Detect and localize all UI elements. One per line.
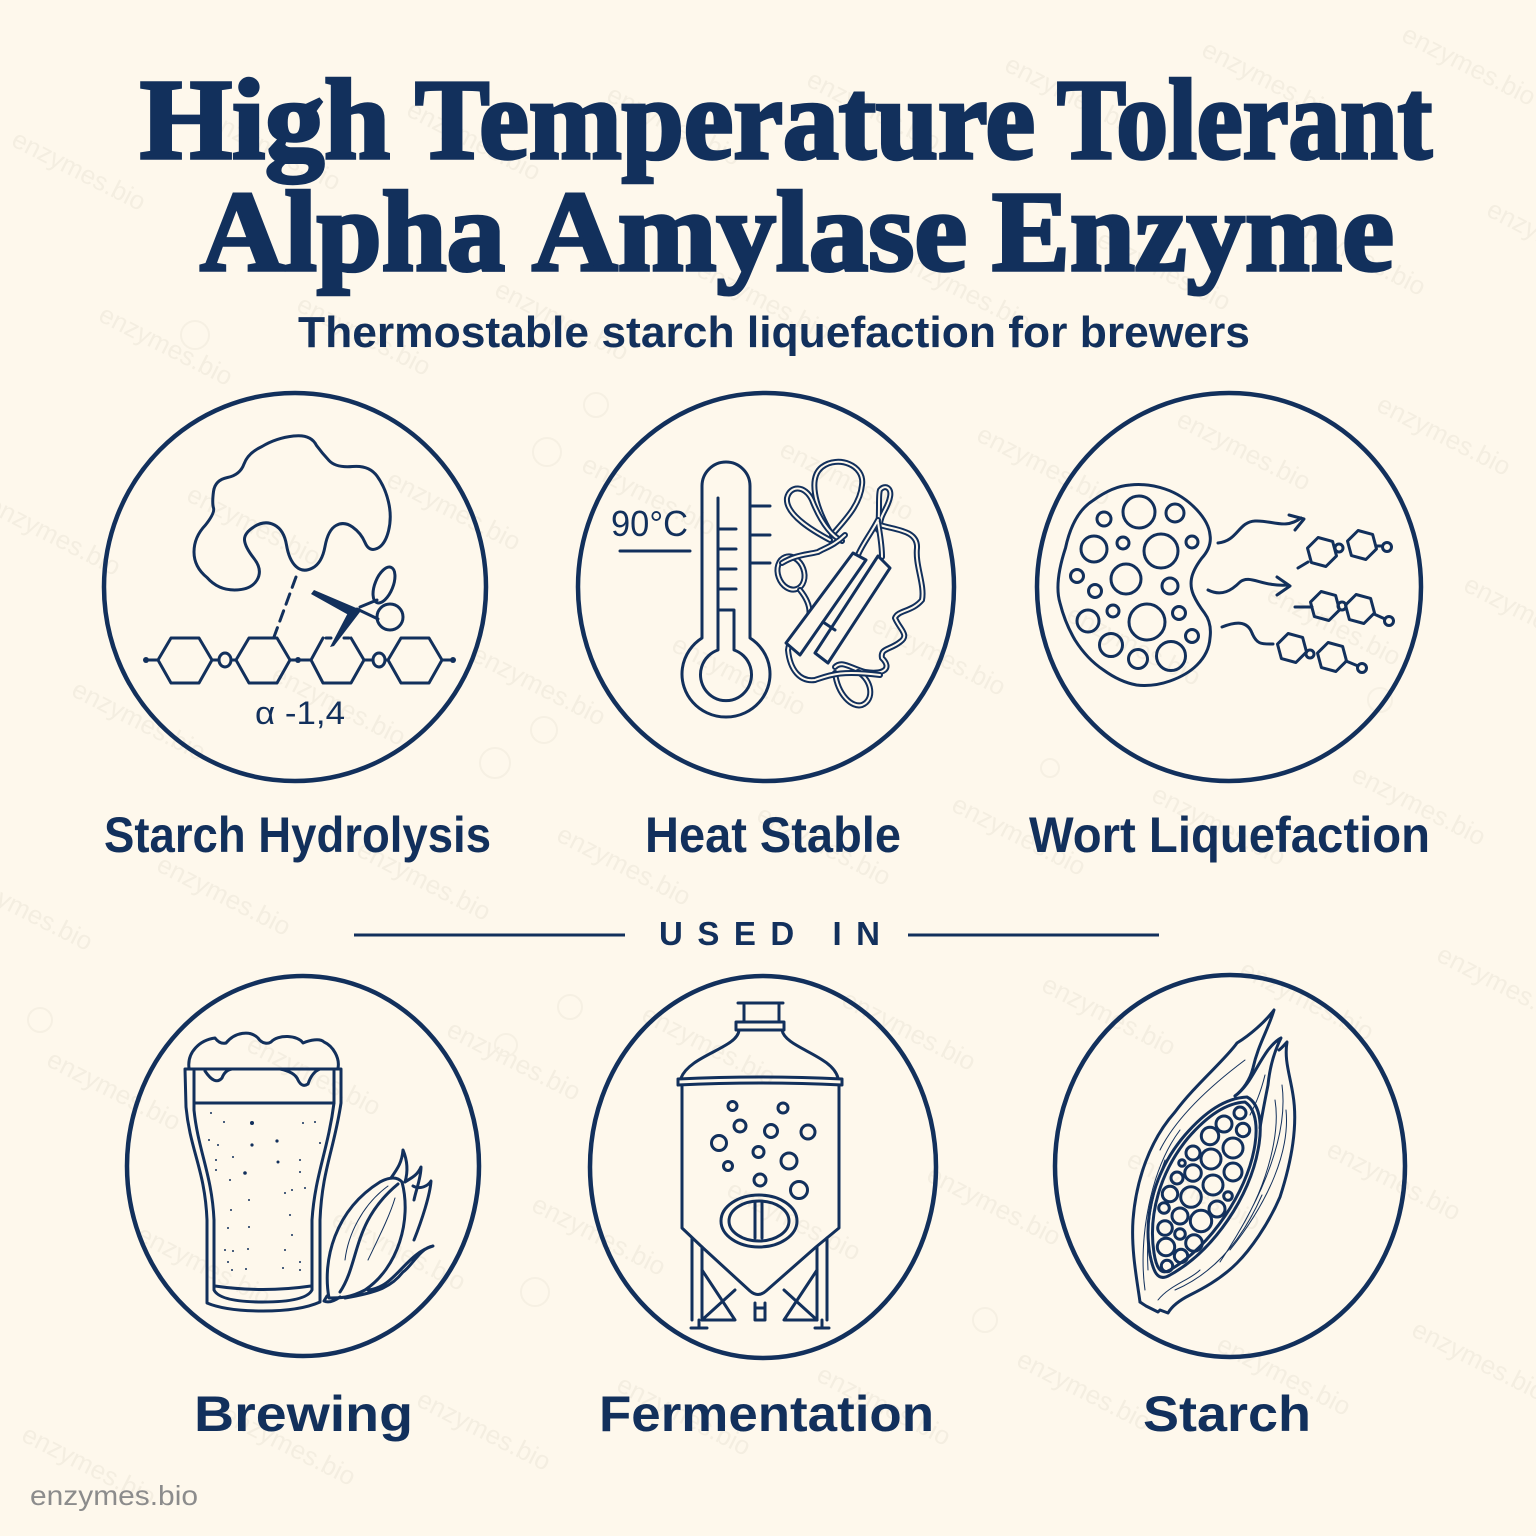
title: Amylase [532,168,967,295]
watermark pattern: enzymes.bio [152,849,296,942]
watermark pattern: enzymes.bio [722,1174,866,1267]
arrow: wave 3 [1222,623,1273,644]
watermark pattern: enzymes.bio [867,609,1011,702]
watermark pattern: enzymes.bio [1235,954,1379,1047]
title: High [140,56,390,183]
title: Alpha [200,168,505,295]
watermark pattern: enzymes.bio [490,274,634,367]
watermark pattern: enzymes.bio [1262,579,1406,672]
watermark pattern: enzymes.bio [202,104,346,197]
panel: wort liquefaction [1037,393,1421,781]
label: fermentation: Fermentation [599,1386,934,1442]
watermark pattern: enzymes.bio [42,1044,186,1137]
dashed bond link [274,577,296,637]
watermark pattern: enzymes.bio [352,834,496,927]
watermark pattern: enzymes.bio [242,1029,386,1122]
watermark pattern: enzymes.bio [1322,1134,1466,1227]
watermark pattern: enzymes.bio [752,799,896,892]
arrow: wave 2 [1208,577,1290,595]
watermark pattern: enzymes.bio [467,639,611,732]
icon ring: starch hydrolysis [104,393,486,781]
brand footer: enzymes.bio [30,1480,198,1511]
watermark pattern: enzymes.bio [667,629,811,722]
panel: brewing [127,976,479,1356]
icon ring: starch [1055,975,1405,1357]
icon ring: heat stable [578,393,954,781]
watermark pattern: enzymes.bio [292,289,436,382]
watermark pattern: enzymes.bio [1000,49,1144,142]
icon: fermentation tank [678,1003,842,1328]
watermark pattern: enzymes.bio [1287,209,1431,302]
watermark pattern: enzymes.bio [1372,389,1516,482]
watermark pattern: enzymes.bio [1037,969,1181,1062]
watermark pattern: enzymes.bio [67,674,211,767]
icon: barley grain [324,1150,433,1302]
watermark pattern: enzymes.bio [922,1159,1066,1252]
watermark pattern: enzymes.bio [1147,779,1291,872]
watermark pattern: enzymes.bio [692,254,836,347]
panel: heat stable [578,393,954,781]
icon ring: wort liquefaction [1037,393,1421,781]
arrow: wave 1 [1218,515,1304,543]
panel: fermentation [590,976,936,1358]
watermark pattern: enzymes.bio [577,449,721,542]
divider: used in: USED IN [659,915,880,952]
watermark pattern: enzymes.bio [812,1359,956,1452]
subtitle: Thermostable starch liquefaction for brewers [298,308,1250,357]
label: heat stable: Heat Stable [645,807,901,863]
watermark pattern: enzymes.bio [267,659,411,752]
watermark pattern: enzymes.bio [1212,1329,1356,1422]
label: starch: Starch [1143,1386,1311,1442]
icon: thermometer [682,462,770,717]
watermark pattern: enzymes.bio [412,1384,556,1477]
watermark pattern: enzymes.bio [775,434,919,527]
watermark pattern: enzymes.bio [402,94,546,187]
watermark pattern: enzymes.bio [602,79,746,172]
panel: starch [1055,975,1405,1357]
icon: scissors [311,564,403,647]
watermark pattern: enzymes.bio [802,64,946,157]
icon: starch coil [194,436,390,590]
watermark pattern: enzymes.bio [612,1369,756,1462]
icon: starch granule [1058,484,1210,686]
watermark pattern: enzymes.bio [1122,1144,1266,1237]
title: Enzyme [992,168,1394,295]
watermark pattern: enzymes.bio [947,789,1091,882]
watermark pattern: enzymes.bio [1092,224,1236,317]
bond label: α -1,4 [255,695,345,731]
title [140,56,1432,295]
watermark pattern: enzymes.bio [1062,599,1206,692]
title: Temperature [415,56,1035,183]
watermark pattern: enzymes.bio [1172,404,1316,497]
temperature label: 90°C [611,503,688,544]
watermark pattern: enzymes.bio [382,464,526,557]
beer bubbles [208,1112,321,1271]
icon: glucose chain [143,638,456,683]
icon: grain husk [1133,1010,1295,1313]
watermark pattern: enzymes.bio [132,1219,276,1312]
label: wort liquefaction: Wort Liquefaction [1029,807,1430,863]
icon: protein ribbon [773,462,923,705]
watermark pattern: enzymes.bio [94,299,238,392]
watermark pattern: enzymes.bio [892,244,1036,337]
panel: starch hydrolysis [104,393,486,781]
faint background circles [28,321,1392,1332]
title: Tolerant [1057,56,1432,183]
watermark pattern: enzymes.bio [17,1419,161,1512]
watermark pattern: enzymes.bio [327,1204,471,1297]
watermark pattern: enzymes.bio [972,419,1116,512]
watermark pattern: enzymes.bio [837,984,981,1077]
icon: maltose molecules [1278,530,1394,672]
icon: beer glass [185,1033,341,1311]
watermark pattern: enzymes.bio [637,999,781,1092]
watermark pattern: enzymes.bio [182,479,326,572]
label: brewing: Brewing [194,1386,413,1442]
watermark pattern: enzymes.bio [552,819,696,912]
icon ring: brewing [127,976,479,1356]
icon ring: fermentation [590,976,936,1358]
watermark pattern: enzymes.bio [1012,1344,1156,1437]
watermark pattern: enzymes.bio [1347,759,1491,852]
watermark pattern: enzymes.bio [442,1014,586,1107]
watermark pattern: enzymes.bio [7,124,151,217]
label: starch hydrolysis: Starch Hydrolysis [104,807,491,863]
watermark pattern: enzymes.bio [217,1399,361,1492]
watermark pattern: enzymes.bio [1197,34,1341,127]
watermark pattern: enzymes.bio [527,1189,671,1282]
